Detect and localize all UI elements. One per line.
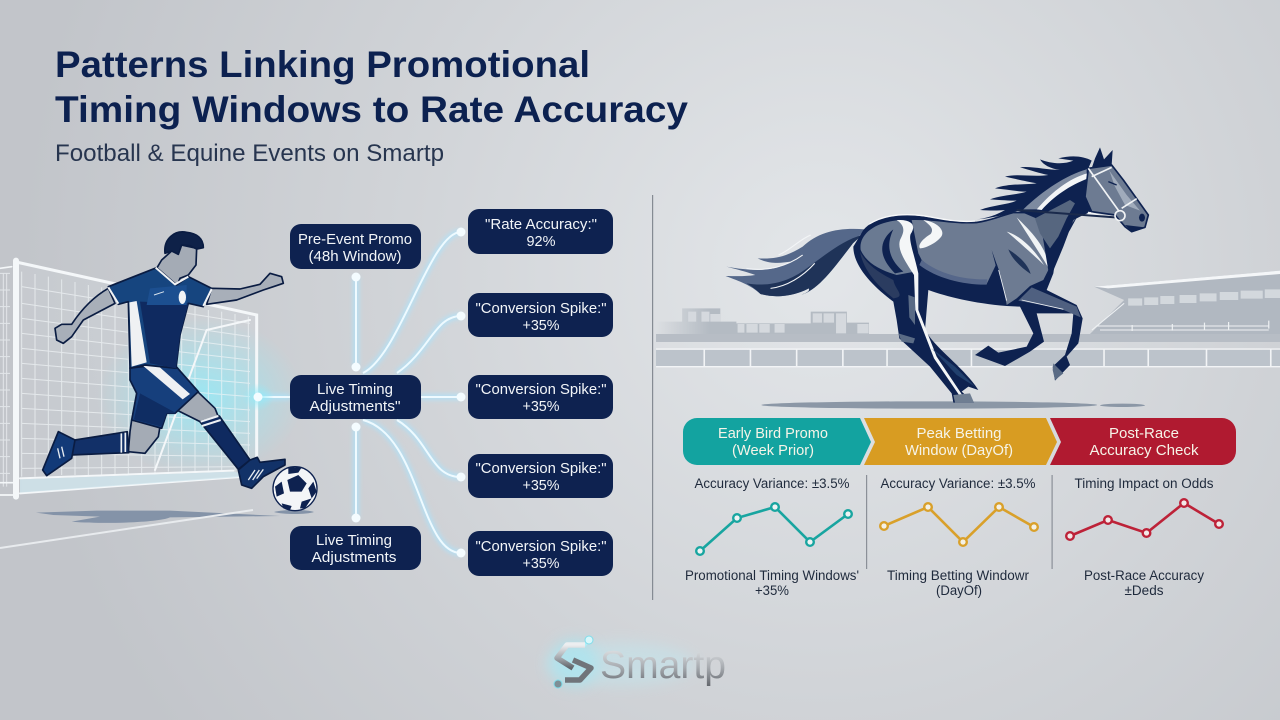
box: conversion spike 1: "Conversion Spike:" xyxy=(476,300,606,317)
track fence xyxy=(656,334,1280,367)
timeline chevrons xyxy=(683,418,1236,465)
box: live timing adjustments (bottom): Adjustments xyxy=(312,549,396,566)
shorts xyxy=(130,363,198,428)
logo: Smartp xyxy=(545,636,726,688)
right arm xyxy=(207,273,283,304)
column 2 labels: Accuracy Variance: ±3.5% xyxy=(880,476,1036,491)
icon: logo mark xyxy=(554,636,593,688)
horse body and legs xyxy=(853,212,1083,403)
chevron: early bird promo xyxy=(683,418,871,465)
line chart: red xyxy=(1066,499,1223,540)
jersey xyxy=(108,268,212,368)
box: rate accuracy xyxy=(468,209,613,254)
back sock xyxy=(70,432,129,455)
column 3 labels: ±Deds xyxy=(1124,583,1164,598)
box: rate accuracy: "Rate Accuracy:" xyxy=(485,216,597,233)
column 2 labels: (DayOf) xyxy=(936,583,982,598)
mane xyxy=(977,156,1092,219)
front sock xyxy=(200,416,250,469)
box: conversion spike 2: "Conversion Spike:" xyxy=(476,381,606,398)
hip highlight xyxy=(897,220,963,397)
box: conversion spike 4: +35% xyxy=(522,555,560,572)
left arm xyxy=(55,288,115,343)
illustration: racecourse background xyxy=(656,271,1280,409)
back boot xyxy=(43,432,75,476)
column 3 labels: Post-Race Accuracy xyxy=(1084,568,1204,583)
box: conversion spike 3 xyxy=(468,454,613,498)
icon: football xyxy=(273,467,317,511)
title: Timing Windows to Rate Accuracy xyxy=(55,89,688,130)
grandstand xyxy=(1084,271,1280,340)
player upper body xyxy=(55,232,283,368)
horse tail xyxy=(726,229,865,296)
illustration: soccer goal xyxy=(0,261,303,497)
hair xyxy=(165,232,203,254)
timeline chevrons: Peak Betting xyxy=(916,425,1002,442)
box: live timing adjustments (middle): Adjustments" xyxy=(310,398,400,415)
neck and face xyxy=(157,245,197,287)
box: conversion spike 1: +35% xyxy=(522,317,560,334)
timeline chevrons: Early Bird Promo xyxy=(718,425,828,442)
box: conversion spike 1 xyxy=(468,293,613,337)
column 1 labels xyxy=(685,476,859,598)
shoulder streaks xyxy=(1017,217,1049,268)
leg sheen xyxy=(908,295,915,325)
horse neck and head xyxy=(977,147,1148,271)
box: conversion spike 2 xyxy=(468,375,613,419)
column 3 labels: Timing Impact on Odds xyxy=(1074,476,1214,491)
column 2 labels: Timing Betting Windowr xyxy=(887,568,1030,583)
logo: Smartp: Smartp xyxy=(600,644,726,687)
chevron: peak betting window xyxy=(864,418,1057,465)
timeline chevrons: (Week Prior) xyxy=(732,442,814,459)
illustration: galloping horse xyxy=(726,147,1148,403)
timeline chevrons: Accuracy Check xyxy=(1090,442,1199,459)
box: live timing adjustments (middle) xyxy=(290,375,421,419)
goal net xyxy=(0,272,250,487)
player shadow xyxy=(36,510,314,523)
rump xyxy=(860,220,915,275)
goal frame xyxy=(0,261,257,497)
back thigh xyxy=(128,420,160,453)
box: pre-event promo: (48h Window) xyxy=(308,248,402,265)
back highlight xyxy=(869,215,975,224)
chevron: post-race accuracy check xyxy=(1050,418,1236,465)
horse ground shadow xyxy=(761,401,1145,409)
subtitle: Football & Equine Events on Smartp xyxy=(55,140,444,167)
front leg highlight xyxy=(1018,287,1081,317)
box: live timing adjustments (middle): Live Timing xyxy=(317,381,393,398)
line chart: teal xyxy=(696,503,852,555)
title: Patterns Linking Promotional xyxy=(55,44,590,85)
box: rate accuracy: 92% xyxy=(526,233,556,250)
line chart: gold xyxy=(880,503,1038,546)
box: conversion spike 3: "Conversion Spike:" xyxy=(476,460,606,477)
goal net glow xyxy=(97,317,303,477)
box: conversion spike 2: +35% xyxy=(522,398,560,415)
box: pre-event promo xyxy=(290,224,421,269)
column 2 labels xyxy=(880,476,1036,598)
column 1 labels: Promotional Timing Windows' xyxy=(685,568,859,583)
player lower body xyxy=(43,363,285,488)
column 3 labels xyxy=(1074,476,1214,598)
front thigh xyxy=(177,391,218,422)
head xyxy=(1092,147,1113,170)
timeline chevrons: Post-Race xyxy=(1109,425,1179,442)
box: live timing adjustments (bottom) xyxy=(290,526,421,570)
title xyxy=(55,44,688,130)
column 1 labels: +35% xyxy=(755,583,789,598)
flow diagram connectors xyxy=(242,228,466,558)
neck xyxy=(1017,168,1092,271)
front boot xyxy=(238,457,285,488)
box: conversion spike 4 xyxy=(468,531,613,576)
timeline chevrons: Window (DayOf) xyxy=(905,442,1013,459)
left buildings xyxy=(656,308,869,334)
bridle xyxy=(1017,167,1137,221)
body panel xyxy=(912,213,1080,305)
box: live timing adjustments (bottom): Live Timing xyxy=(316,532,392,549)
illustration: football player xyxy=(43,232,285,488)
box: conversion spike 3: +35% xyxy=(522,477,560,494)
column 1 labels: Accuracy Variance: ±3.5% xyxy=(694,476,850,491)
box: pre-event promo: Pre-Event Promo xyxy=(298,231,412,248)
box: conversion spike 4: "Conversion Spike:" xyxy=(476,538,606,555)
